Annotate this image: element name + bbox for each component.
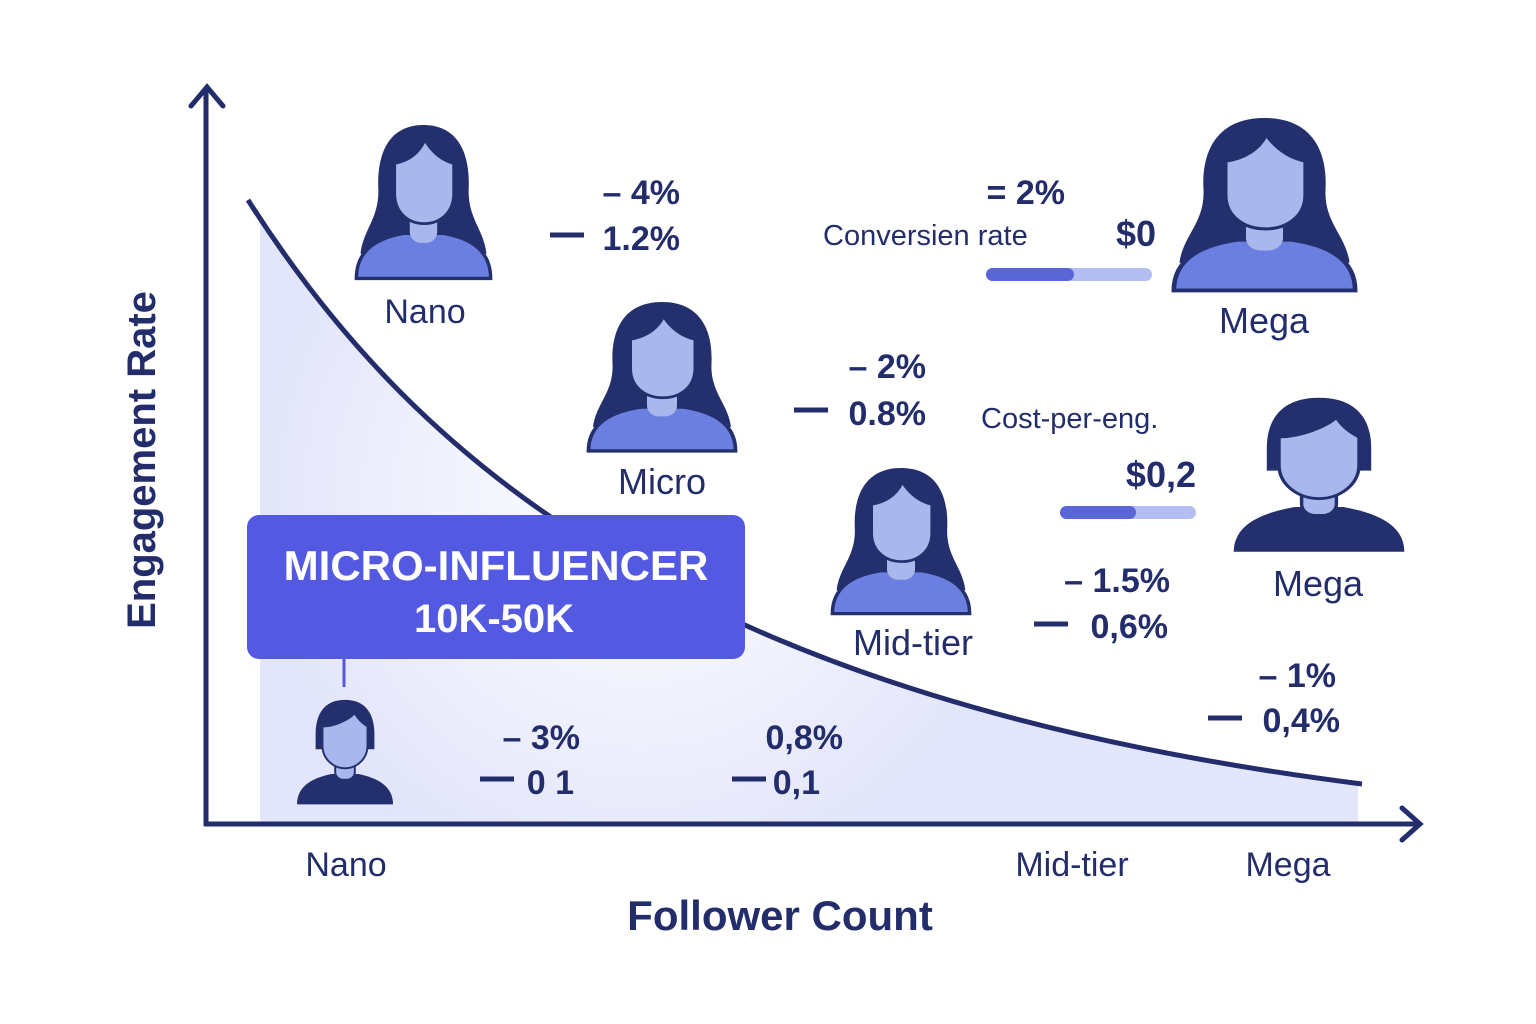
avatar: small nano	[297, 700, 393, 804]
avatar: micro	[588, 302, 736, 451]
stats: bottom middle	[732, 719, 843, 802]
stats: bottom middle: 0,1	[773, 764, 820, 802]
callout: micro-influencer: MICRO-INFLUENCER	[284, 542, 708, 589]
label mid-tier: Mid-tier	[853, 622, 973, 663]
callout: micro-influencer: 10K-50K	[414, 597, 574, 641]
stats: nano: – 4%	[602, 174, 680, 212]
avatar: mid-tier	[832, 468, 970, 614]
stats: micro	[794, 348, 926, 433]
label mega top: Mega	[1219, 300, 1310, 341]
stats: bottom nano: 0 1	[527, 764, 574, 802]
x tick labels: Nano	[305, 846, 387, 884]
conversion rate block: Conversien rate	[823, 220, 1028, 252]
label nano: Nano	[384, 293, 466, 331]
avatar: mega man	[1234, 398, 1404, 552]
curve	[248, 200, 1362, 784]
conversion rate block: $0	[1116, 213, 1156, 254]
stats: micro: – 2%	[848, 348, 926, 386]
stats: mid-tier: – 1.5%	[1064, 562, 1170, 600]
callout: micro-influencer	[247, 515, 745, 659]
avatar: mega top	[1174, 118, 1355, 290]
stats: micro: 0.8%	[848, 395, 926, 433]
x tick labels	[305, 846, 1331, 884]
label micro: Micro	[618, 461, 706, 502]
stats: nano	[550, 174, 680, 258]
stats: mid-tier	[1034, 562, 1170, 646]
x axis	[204, 808, 1420, 840]
stats: bottom middle: 0,8%	[766, 719, 843, 757]
cost per engagement block	[981, 403, 1196, 519]
x tick labels: Mid-tier	[1015, 846, 1129, 884]
conversion rate block	[823, 174, 1156, 281]
y axis	[191, 87, 223, 826]
stats: mega: 0,4%	[1262, 702, 1340, 740]
stats: mega	[1208, 657, 1340, 740]
y axis label: Engagement Rate	[120, 291, 164, 629]
conversion rate block: = 2%	[987, 174, 1065, 212]
stats: mega: – 1%	[1258, 657, 1336, 695]
callout connector	[342, 658, 346, 687]
stats: bottom nano	[480, 719, 580, 802]
stats: nano: 1.2%	[602, 220, 680, 258]
x axis label: Follower Count	[627, 892, 933, 939]
label mega second: Mega	[1273, 563, 1364, 604]
stats: bottom nano: – 3%	[502, 719, 580, 757]
avatar: nano	[356, 125, 491, 278]
stats: mid-tier: 0,6%	[1090, 608, 1168, 646]
cost per engagement block: $0,2	[1126, 454, 1196, 495]
x tick labels: Mega	[1245, 846, 1331, 884]
cost per engagement block: Cost-per-eng.	[981, 403, 1158, 435]
area under curve	[260, 215, 1358, 822]
